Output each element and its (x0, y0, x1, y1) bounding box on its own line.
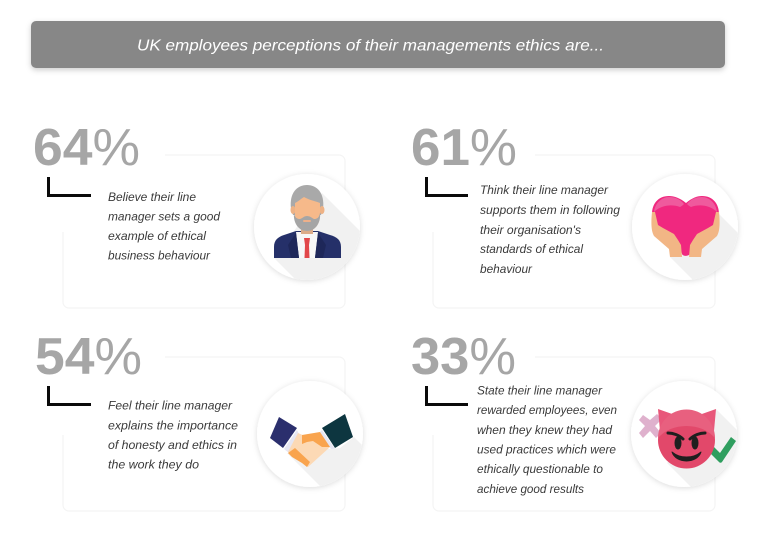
statistic: 54%: 54% (35, 328, 142, 386)
statistic: 33%: 33% (411, 328, 516, 386)
description: when they knew they had (477, 423, 612, 437)
description: explains the importance (108, 418, 238, 432)
description: the work they do (108, 458, 199, 472)
title banner (31, 21, 725, 68)
description: standards of ethical (480, 242, 583, 256)
description: of honesty and ethics in (108, 438, 237, 452)
description: manager sets a good (108, 210, 220, 224)
panel: 64% line manager example (35, 128, 362, 308)
statistic: 61%: 61% (411, 119, 517, 177)
bracket (48, 177, 91, 196)
icon: devil face with cross and tick (629, 380, 739, 490)
description: used practices which were (477, 442, 616, 456)
title banner: UK employees perceptions of their managements ethics are... (137, 38, 604, 54)
panel: 61% supports ethical standards (412, 128, 740, 308)
bracket (426, 386, 468, 404)
description (480, 183, 620, 276)
description (108, 190, 220, 262)
description: example of ethical (108, 229, 206, 243)
statistic: 64%: 64% (33, 119, 140, 177)
bracket (48, 386, 91, 404)
description: Think their line manager (480, 183, 609, 197)
bracket (426, 177, 468, 196)
description: supports them in following (480, 203, 620, 217)
description: State their line manager (477, 384, 603, 398)
panel: 54% honesty and ethics (36, 338, 365, 512)
icon: heart in hands (630, 173, 740, 283)
icon: handshake (255, 380, 365, 490)
description: ethically questionable to (477, 462, 603, 476)
description: behaviour (480, 262, 533, 276)
description: Believe their line (108, 190, 196, 204)
icon: manager (252, 173, 362, 283)
panel: 33% rewarded questionable practices (412, 338, 739, 512)
description: rewarded employees, even (477, 403, 617, 417)
description (108, 398, 238, 472)
description: Feel their line manager (108, 398, 233, 412)
description: achieve good results (477, 482, 584, 496)
description (477, 384, 617, 496)
description: their organisation's (480, 223, 581, 237)
description: business behaviour (108, 248, 211, 262)
